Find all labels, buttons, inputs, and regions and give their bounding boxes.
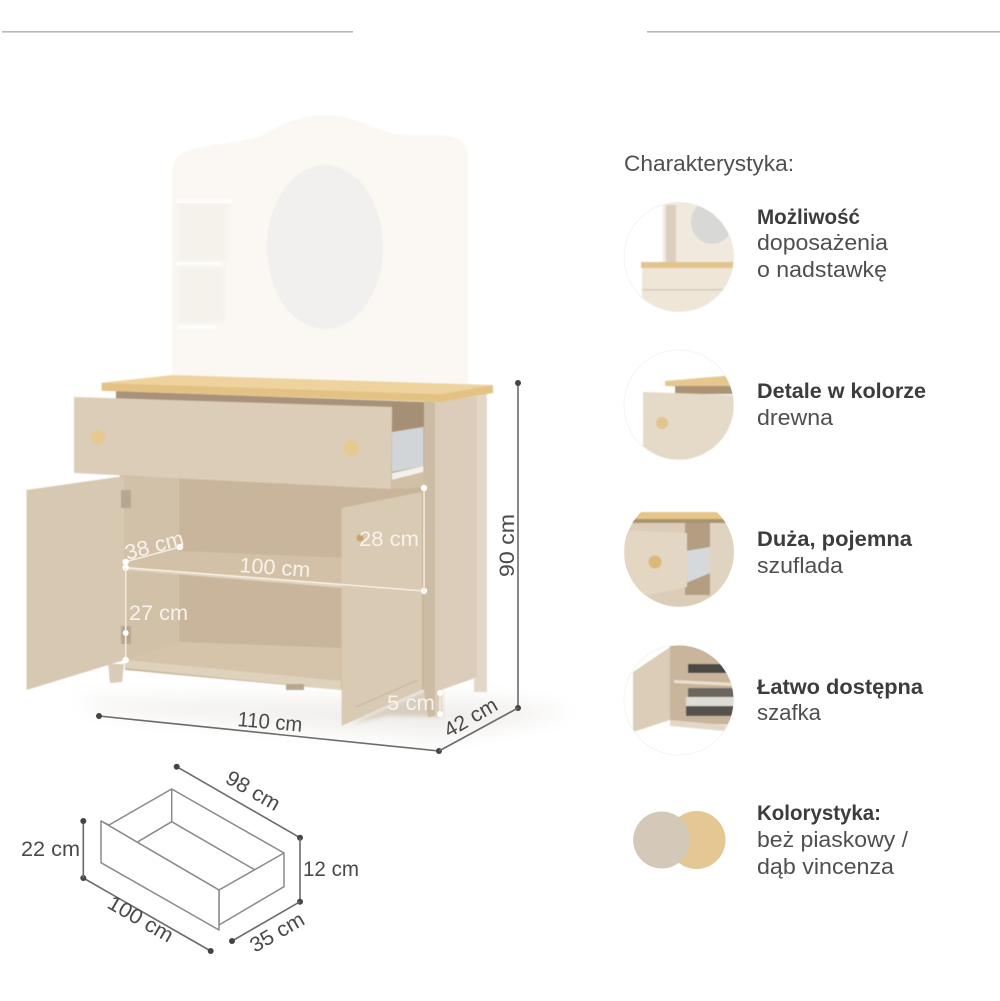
100 cm inner width: 100 cm [239,554,311,582]
description: add-on hutch: o nadstawkę [757,257,887,282]
middle foot [286,684,304,690]
swatch: oak [668,811,726,869]
feature: large drawer [624,512,912,607]
plinth [125,660,341,690]
features heading: Charakterystyka: [624,151,794,176]
lower shelf [125,642,341,682]
rail under top [116,391,424,412]
feature: add-on hutch [624,200,889,316]
description: add-on hutch [757,230,889,282]
back leg and rear edge [474,394,487,692]
22 cm drawer height [21,818,86,878]
27 cm shelf height: 27 cm [129,602,188,625]
heading: colours: Kolorystyka: [757,802,881,825]
door knob [356,534,364,542]
description: colours: dąb vincenza [757,854,895,879]
right door [342,492,422,726]
description: colours [757,827,909,879]
furniture illustration [26,115,575,738]
35 cm drawer width [229,902,309,957]
drawer box [392,427,424,472]
white inner dimensions [122,485,443,717]
drawer outline [101,789,284,930]
110 cm width: 110 cm [237,708,303,737]
description: colours: beż piaskowy / [757,827,909,852]
floor shadow [70,700,575,738]
wooden top [102,375,493,402]
27 cm shelf height [122,568,188,663]
thumbnail: wood top and knob [642,375,734,460]
feature: wood details [624,350,926,460]
100 cm drawer length [80,875,214,954]
12 cm inner height [297,838,359,905]
28 cm shelf height: 28 cm [359,528,419,551]
outer dimensions [96,380,521,754]
heading: add-on hutch: Możliwość [757,206,860,229]
98 cm drawer length: 98 cm [222,766,284,816]
35 cm drawer width: 35 cm [246,908,309,957]
side panel [424,400,435,717]
left door [26,476,125,690]
thumbnail: open drawer [624,512,734,607]
28 cm shelf height [359,485,427,591]
22 cm drawer height: 22 cm [21,838,80,861]
cabinet interior back [118,392,424,690]
drawer opening [392,403,424,489]
90 cm height: 90 cm [496,514,519,577]
thumbnail outline: wood details [624,350,734,460]
42 cm depth [439,693,518,751]
description: wood details: drewna [757,405,834,430]
thumbnail outline: hutch [624,202,734,312]
98 cm drawer length [174,764,303,841]
heading: large drawer: Duża, pojemna [757,528,912,551]
5 cm leg height [387,690,443,717]
drawer front [74,397,392,489]
swatch: sand beige [633,812,690,868]
thumbnail: open cabinet [632,646,734,732]
5 cm leg height: 5 cm [387,692,435,715]
42 cm depth: 42 cm [440,693,502,742]
door hinges [121,490,131,644]
faded hutch with mirror [172,115,468,385]
shadow behind right door corner [350,690,442,724]
feature: colours [633,802,909,879]
110 cm width [96,708,442,754]
100 cm inner width [122,554,427,594]
38 cm depth: 38 cm [122,527,186,565]
drawer diagram [21,764,359,957]
description: add-on hutch: doposażenia [757,230,889,255]
left leg [108,664,124,683]
upper shelf [126,551,345,584]
12 cm inner height: 12 cm [303,858,359,881]
feature: accessible cabinet [624,640,923,755]
heading: wood details: Detale w kolorze [757,380,926,403]
100 cm drawer length: 100 cm [104,891,177,947]
description: accessible cabinet: szafka [757,700,822,725]
description: large drawer: szuflada [757,553,844,578]
cabinet left wall [125,476,179,660]
90 cm height [496,380,521,711]
heading: accessible cabinet: Łatwo dostępna [757,676,923,699]
drawer knobs [91,430,359,456]
thumbnail: hutch [640,202,734,312]
thumbnail outline: accessible cabinet [624,645,734,755]
